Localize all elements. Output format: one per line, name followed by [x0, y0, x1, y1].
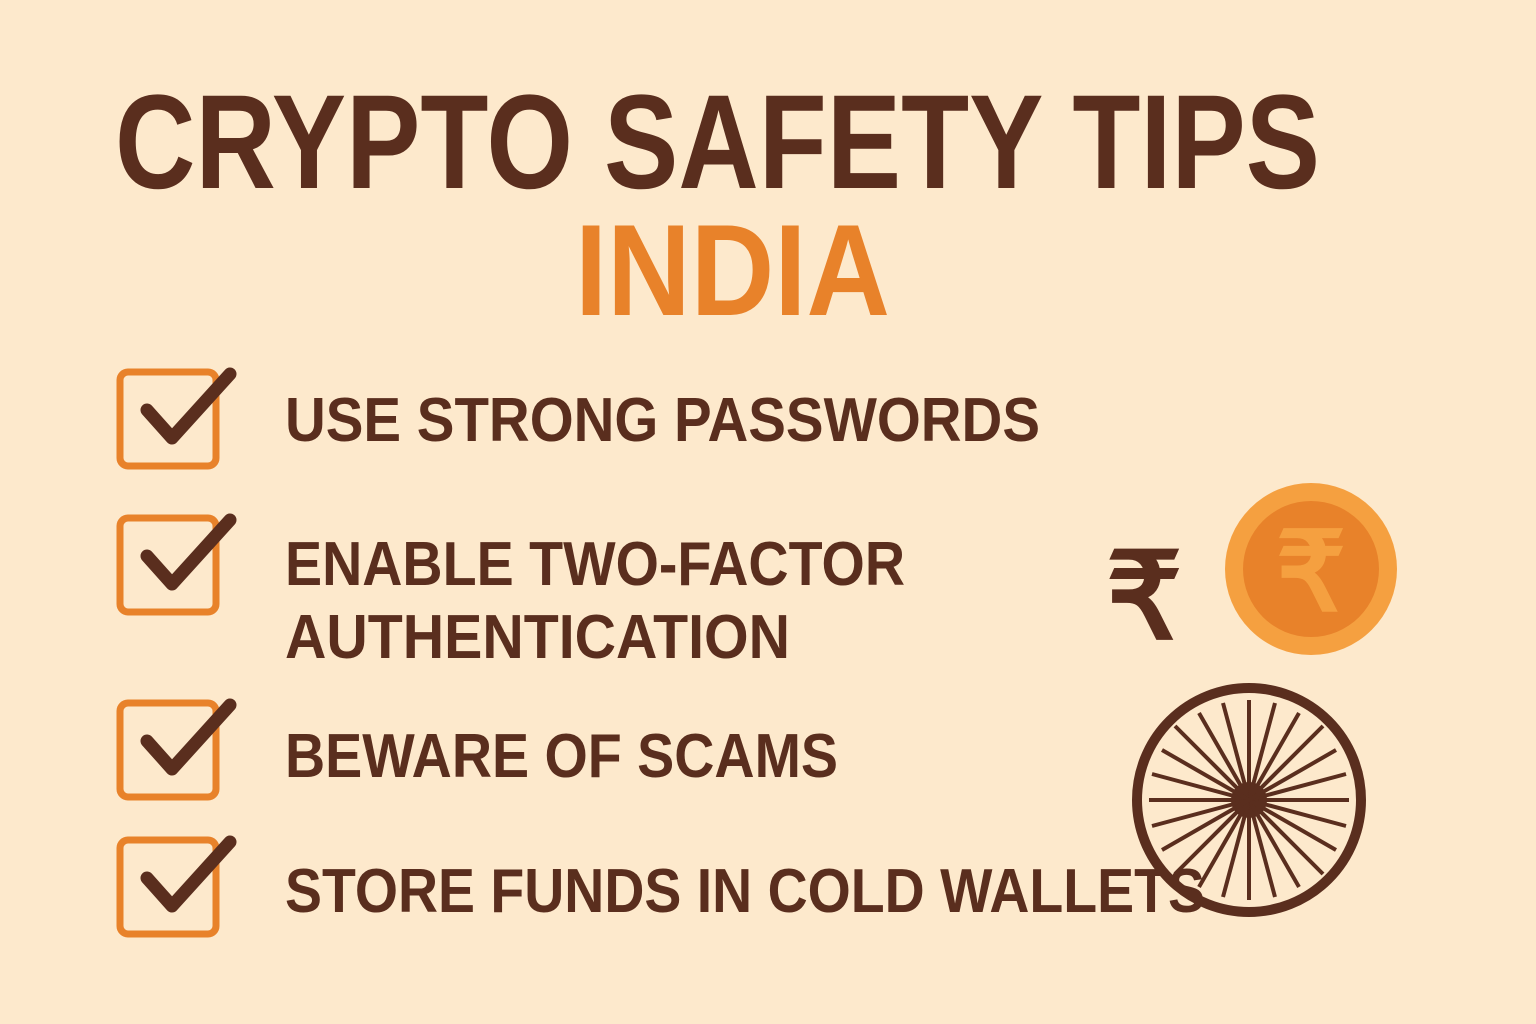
item 2: ENABLE TWO-FACTOR	[285, 530, 905, 599]
icon: rupee coin	[1225, 483, 1397, 655]
item 3: BEWARE OF SCAMS	[285, 722, 838, 791]
item 2	[120, 518, 905, 672]
item 3	[120, 703, 838, 797]
icon: checkbox 2	[120, 518, 230, 612]
icon: rupee symbol: ₹	[1106, 530, 1182, 664]
icon: rupee coin: ₹	[1276, 511, 1346, 634]
item 1: USE STRONG PASSWORDS	[285, 386, 1040, 455]
item 2: AUTHENTICATION	[285, 603, 790, 672]
item 4: STORE FUNDS IN COLD WALLETS	[285, 857, 1205, 926]
subtitle: INDIA: INDIA	[575, 197, 890, 343]
item 4	[120, 840, 1205, 934]
icon: ashoka chakra	[1137, 688, 1361, 912]
title: CRYPTO SAFETY TIPS	[115, 68, 1320, 217]
icon: checkbox 1	[120, 372, 230, 466]
item 1	[120, 372, 1040, 466]
icon: checkbox 3	[120, 703, 230, 797]
icon: checkbox 4	[120, 840, 230, 934]
